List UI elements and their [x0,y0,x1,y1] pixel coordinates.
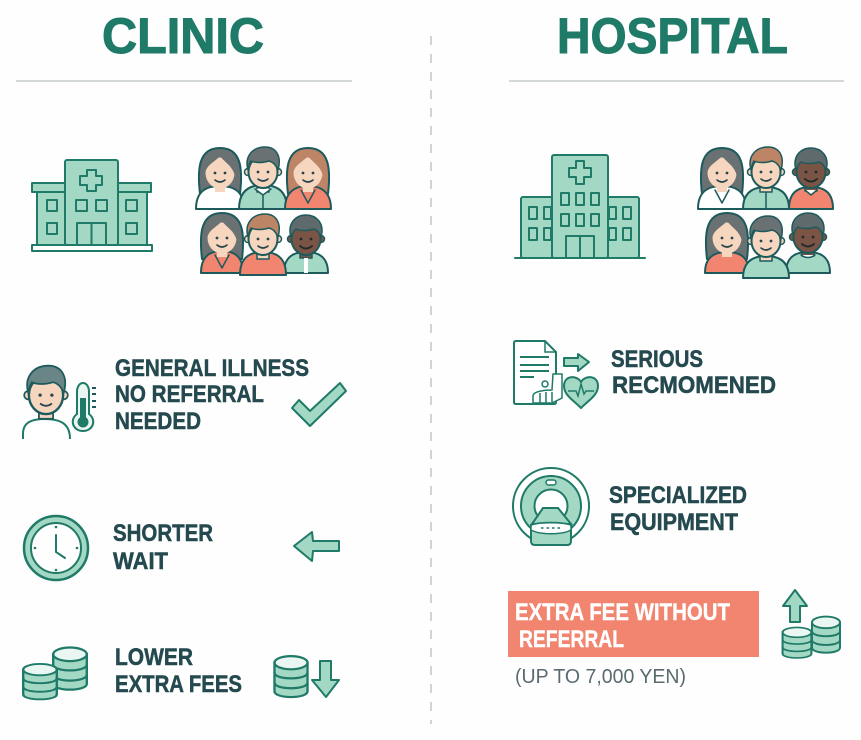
text: general illness: NO REFERRAL [115,381,264,408]
person: man in coral, lower [240,214,286,275]
center dashed divider [430,36,432,724]
text: lower extra fees: EXTRA FEES [115,671,242,698]
text: specialized equipment: EQUIPMENT [610,509,738,536]
text: general illness [115,355,309,435]
person: man in green, lower right [786,213,830,273]
text: general illness: NEEDED [115,408,201,435]
text: lower extra fees: LOWER [115,644,193,671]
icon: referral document and heart [514,341,598,408]
callout: extra fee without referral [508,591,759,657]
text: shorter wait: SHORTER [113,520,213,547]
title: hospital: HOSPITAL [557,8,788,64]
icon: coin stacks [23,648,87,699]
person: man in green, lower [284,215,328,273]
callout: extra fee without referral: REFERRAL [519,626,624,653]
people group: hospital [698,147,833,278]
text: shorter wait [113,520,213,575]
icon: left arrow [294,532,339,561]
icon: coins with up arrow [783,590,840,658]
text: shorter wait: WAIT [113,548,168,575]
people group: clinic [196,147,331,275]
icon: check mark [292,383,346,426]
icon: hospital building [515,155,645,258]
icon: coins with down arrow [274,656,339,697]
person: woman in coral, lower [705,213,749,273]
person: man in green, lower middle [743,216,789,278]
person: woman in white coat [698,148,746,209]
text: serious recommended: SERIOUS [611,346,703,373]
person: woman in white [196,148,244,209]
person: man in green [239,147,287,209]
icon: MRI scanner [513,468,589,545]
text: serious recommended: RECMOMENED [612,372,776,399]
person: man in coral [789,148,833,209]
callout: extra fee without referral: EXTRA FEE WITHOUT [515,599,730,626]
icon: clinic building [32,160,152,251]
text: serious recommended [611,346,776,399]
text: up to 7,000 yen: (UP TO 7,000 YEN) [515,666,686,688]
icon: clock [24,516,88,580]
person: man in green [743,147,789,209]
text: lower extra fees [115,644,242,698]
title: clinic: CLINIC [102,8,264,64]
text: specialized equipment: SPECIALIZED [609,482,747,509]
icon: patient with thermometer [23,366,96,439]
person: woman in red [285,148,331,209]
person: woman in red, lower [201,213,243,273]
text: general illness: GENERAL ILLNESS [115,355,309,382]
text: specialized equipment [609,482,747,536]
